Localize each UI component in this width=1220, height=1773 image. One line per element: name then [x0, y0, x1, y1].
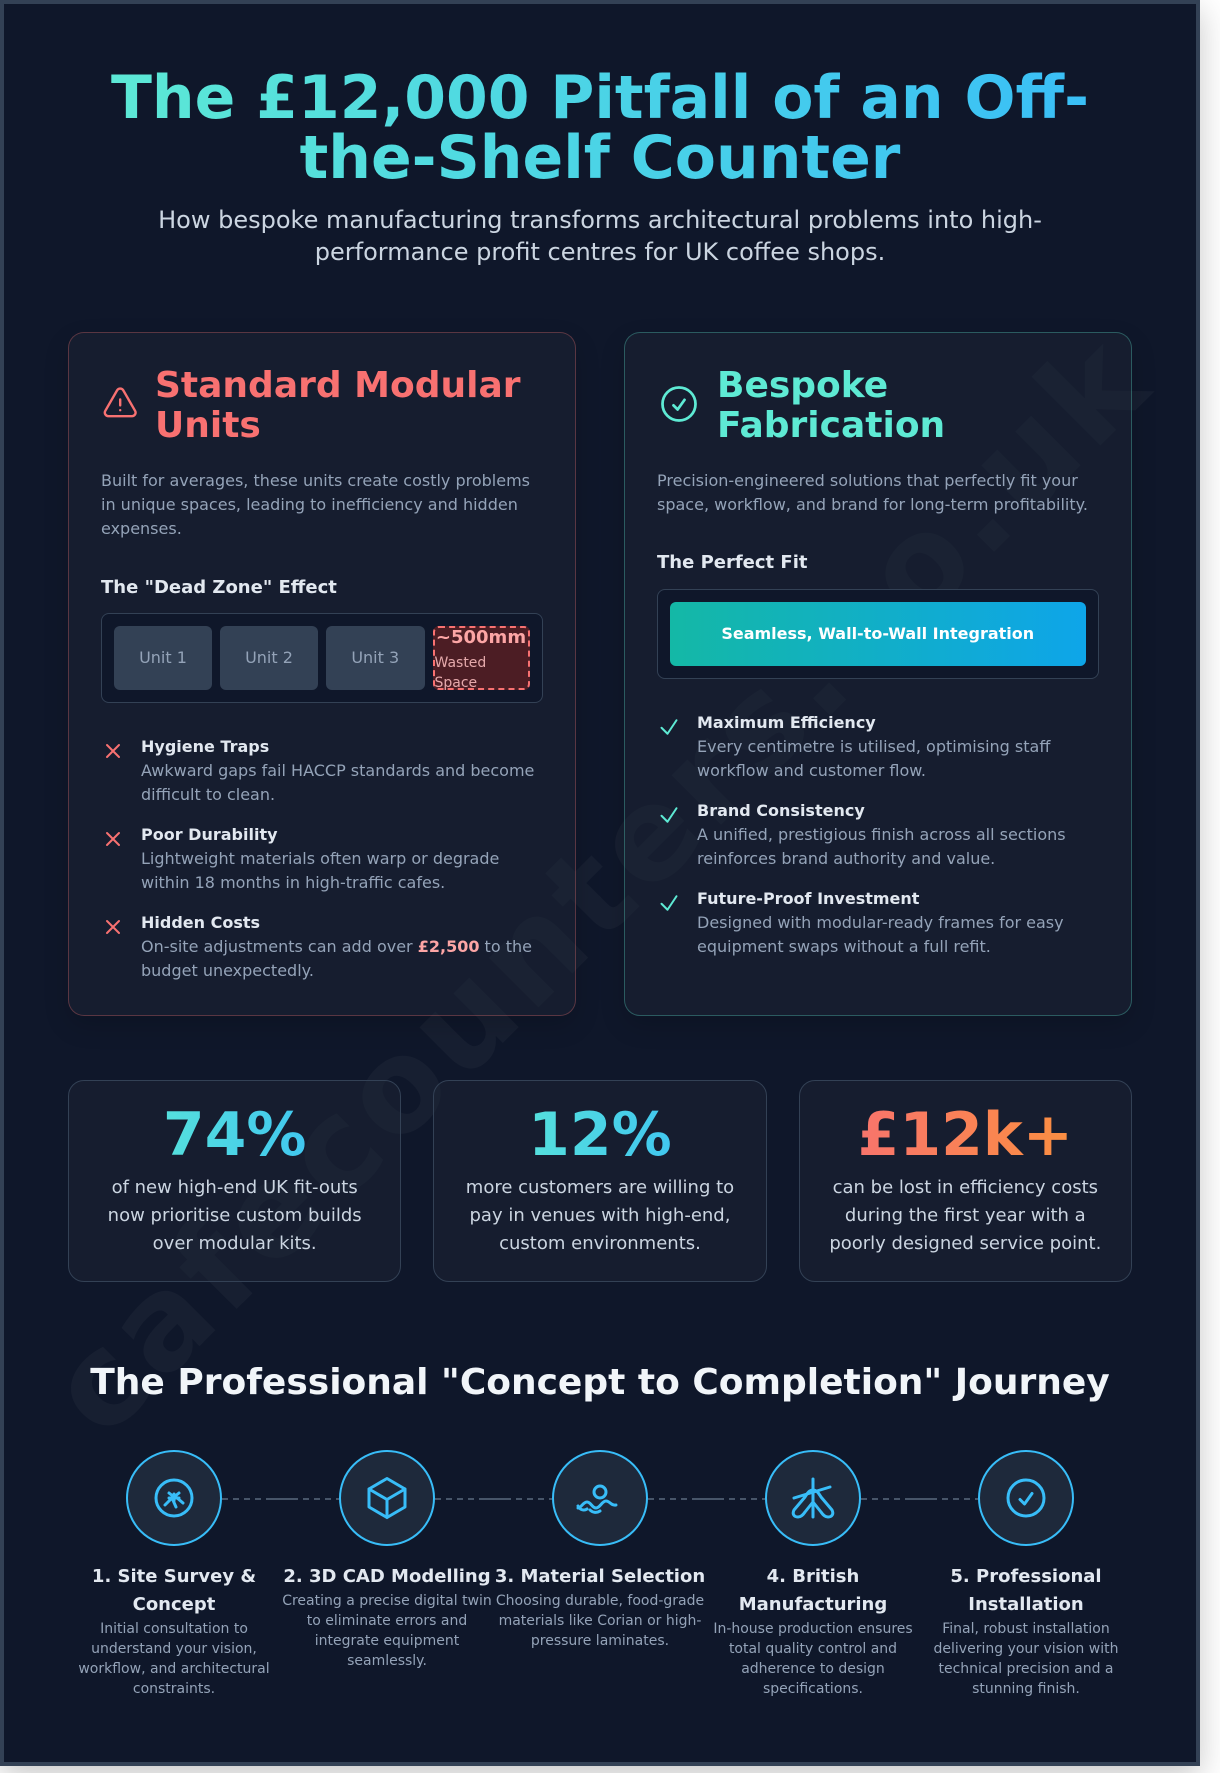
intro text: Precision-engineered solutions that perfectly fit your: [657, 470, 1078, 490]
unit 3: Unit 3: [351, 648, 399, 667]
step title: 3. Material Selection: [495, 1566, 705, 1586]
stat description: [466, 1177, 734, 1254]
step title: Concept: [133, 1594, 215, 1614]
stat description: over modular kits.: [153, 1233, 317, 1254]
list item: hidden costs: On-site adjustments can add over £2,500 to the: [141, 937, 532, 956]
stat card: £12k+: [799, 1080, 1132, 1282]
list item: poor durability: within 18 months in high-traffic cafes.: [141, 873, 445, 892]
icon: warning triangle: [104, 387, 137, 418]
icon: material: [552, 1450, 648, 1546]
list item: brand consistency: A unified, prestigious finish across all sections: [697, 825, 1066, 844]
step description: [78, 1621, 270, 1697]
list item: poor durability: Poor Durability: [141, 825, 278, 844]
stat value: 12%: [528, 1100, 672, 1170]
intro text: [101, 470, 530, 538]
step description: total quality control and: [729, 1641, 897, 1657]
step title: Installation: [968, 1594, 1084, 1614]
step description: integrate equipment: [315, 1633, 459, 1649]
step description: In-house production ensures: [713, 1621, 913, 1637]
dead zone wasted space: Space: [434, 675, 477, 691]
title: The £12,000 Pitfall of an Off-: [111, 63, 1089, 133]
step description: [496, 1593, 704, 1649]
watermark: cafecounters.co.uk: [20, 305, 1179, 1464]
step title: [739, 1566, 887, 1614]
stat description: more customers are willing to: [466, 1177, 734, 1198]
step description: constraints.: [133, 1681, 215, 1697]
step description: [934, 1621, 1118, 1697]
step description: Creating a precise digital twin: [282, 1593, 492, 1609]
step title: 5. Professional: [950, 1566, 1102, 1586]
step description: to eliminate errors and: [307, 1613, 467, 1629]
step description: materials like Corian or high-: [499, 1613, 701, 1629]
panel: bespoke fabrication: [624, 332, 1132, 1016]
step description: stunning finish.: [972, 1681, 1080, 1697]
step 5: professional installation: [934, 1450, 1118, 1697]
seamless bar: Seamless, Wall-to-Wall Integration: [721, 624, 1034, 643]
list item: maximum efficiency: [660, 713, 1051, 780]
step description: Final, robust installation: [942, 1621, 1110, 1637]
step title: 2. 3D CAD Modelling: [283, 1566, 491, 1586]
journey heading: The Professional "Concept to Completion" Journey: [90, 1362, 1110, 1403]
unit 2: Unit 2: [245, 648, 293, 667]
step description: technical precision and a: [938, 1661, 1114, 1677]
seamless bar: [670, 602, 1086, 666]
list item: poor durability: [106, 825, 499, 892]
stat value: [466, 1105, 734, 1165]
stat description: pay in venues with high-end,: [470, 1205, 730, 1226]
step description: understand your vision,: [91, 1641, 257, 1657]
heading: standard modular units: Units: [155, 405, 261, 446]
list item: future-proof investment: [660, 889, 1064, 956]
connector lines between steps: [222, 1498, 978, 1500]
list item: hygiene traps: [106, 737, 534, 804]
step description: Choosing durable, food-grade: [496, 1593, 704, 1609]
list item: hygiene traps: Awkward gaps fail HACCP standards and become: [141, 761, 534, 780]
step title: 4. British: [767, 1566, 859, 1586]
dead zone wasted space: ~500mm: [436, 627, 526, 648]
list item: maximum efficiency: Every centimetre is utilised, optimising staff: [697, 737, 1050, 756]
icon: check circle: [978, 1450, 1074, 1546]
stat description: custom environments.: [499, 1233, 701, 1254]
stat description: [108, 1177, 362, 1254]
stat value: [101, 1105, 368, 1165]
icon: check circle: [661, 386, 697, 422]
list item: hidden costs: budget unexpectedly.: [141, 961, 314, 980]
unit 3: [326, 626, 424, 690]
intro text: expenses.: [101, 518, 182, 538]
list item: hidden costs: Hidden Costs: [141, 913, 260, 932]
subheading: perfect fit: The Perfect Fit: [657, 552, 808, 573]
step description: specifications.: [763, 1681, 863, 1697]
icon: manufacturing tools: [765, 1450, 861, 1546]
panel: standard modular units: [68, 332, 576, 1016]
stat description: during the first year with a: [845, 1205, 1086, 1226]
step title: Manufacturing: [739, 1594, 887, 1614]
heading: standard modular units: [155, 365, 521, 446]
stat card: 12%: [433, 1080, 767, 1282]
step title: [950, 1566, 1102, 1614]
unit 1: [114, 626, 212, 690]
step description: [282, 1593, 492, 1669]
icon: site survey: [126, 1450, 222, 1546]
list item: future-proof investment: equipment swaps without a full refit.: [697, 937, 991, 956]
list item: hidden costs: [106, 913, 532, 980]
subheading: dead zone: The "Dead Zone" Effect: [101, 577, 337, 598]
stat value: 74%: [163, 1100, 306, 1170]
heading: bespoke fabrication: Bespoke: [717, 365, 888, 406]
stat description: can be lost in efficiency costs: [833, 1177, 1098, 1198]
step description: workflow, and architectural: [78, 1661, 270, 1677]
heading: standard modular units: Standard Modular: [155, 365, 521, 406]
intro text: space, workflow, and brand for long-term profitability.: [657, 494, 1088, 514]
list item: future-proof investment: Future-Proof Investment: [697, 889, 919, 908]
icon: cube: [339, 1450, 435, 1546]
unit 2: [220, 626, 318, 690]
stat description: now prioritise custom builds: [108, 1205, 362, 1226]
dead zone wasted space: [432, 626, 530, 690]
stat description: poorly designed service point.: [829, 1233, 1101, 1254]
title: [68, 68, 1132, 188]
list item: poor durability: Lightweight materials often warp or degrade: [141, 849, 499, 868]
step title: [92, 1566, 256, 1614]
step 1: site survey: [78, 1450, 270, 1697]
step 4: british manufacturing: [713, 1450, 913, 1697]
list item: brand consistency: [660, 801, 1066, 868]
stat value: £12k+: [858, 1100, 1073, 1170]
subtitle: performance profit centres for UK coffee shops.: [315, 238, 885, 266]
step description: [713, 1621, 913, 1697]
heading: bespoke fabrication: [717, 365, 945, 446]
dead zone wasted space: Wasted: [434, 655, 486, 671]
intro text: Built for averages, these units create costly problems: [101, 470, 530, 490]
stat card: 74%: [68, 1080, 401, 1282]
heading: bespoke fabrication: Fabrication: [717, 405, 945, 446]
intro text: in unique spaces, leading to inefficiency and hidden: [101, 494, 518, 514]
subtitle: How bespoke manufacturing transforms architectural problems into high-: [158, 206, 1042, 234]
list item: brand consistency: Brand Consistency: [697, 801, 865, 820]
intro text: [657, 470, 1088, 514]
step description: Initial consultation to: [100, 1621, 248, 1637]
list item: brand consistency: reinforces brand authority and value.: [697, 849, 995, 868]
list item: hygiene traps: Hygiene Traps: [141, 737, 269, 756]
list item: maximum efficiency: workflow and customer flow.: [697, 761, 926, 780]
step 2: 3d cad modelling: [282, 1450, 492, 1669]
diagram: seamless integration: [657, 589, 1098, 679]
list item: hygiene traps: difficult to clean.: [141, 785, 275, 804]
step description: seamlessly.: [347, 1653, 427, 1669]
list item: future-proof investment: Designed with modular-ready frames for easy: [697, 913, 1064, 932]
title: the-Shelf Counter: [300, 123, 900, 193]
diagram: modular units with dead zone: [101, 613, 542, 703]
list item: maximum efficiency: Maximum Efficiency: [697, 713, 876, 732]
stat description: of new high-end UK fit-outs: [112, 1177, 358, 1198]
step description: delivering your vision with: [934, 1641, 1118, 1657]
step description: pressure laminates.: [531, 1633, 669, 1649]
step 3: material selection: [495, 1450, 705, 1649]
subtitle: [158, 206, 1042, 266]
step title: 1. Site Survey &: [92, 1566, 256, 1586]
stat description: [829, 1177, 1101, 1254]
unit 1: Unit 1: [139, 648, 187, 667]
step description: adherence to design: [741, 1661, 885, 1677]
